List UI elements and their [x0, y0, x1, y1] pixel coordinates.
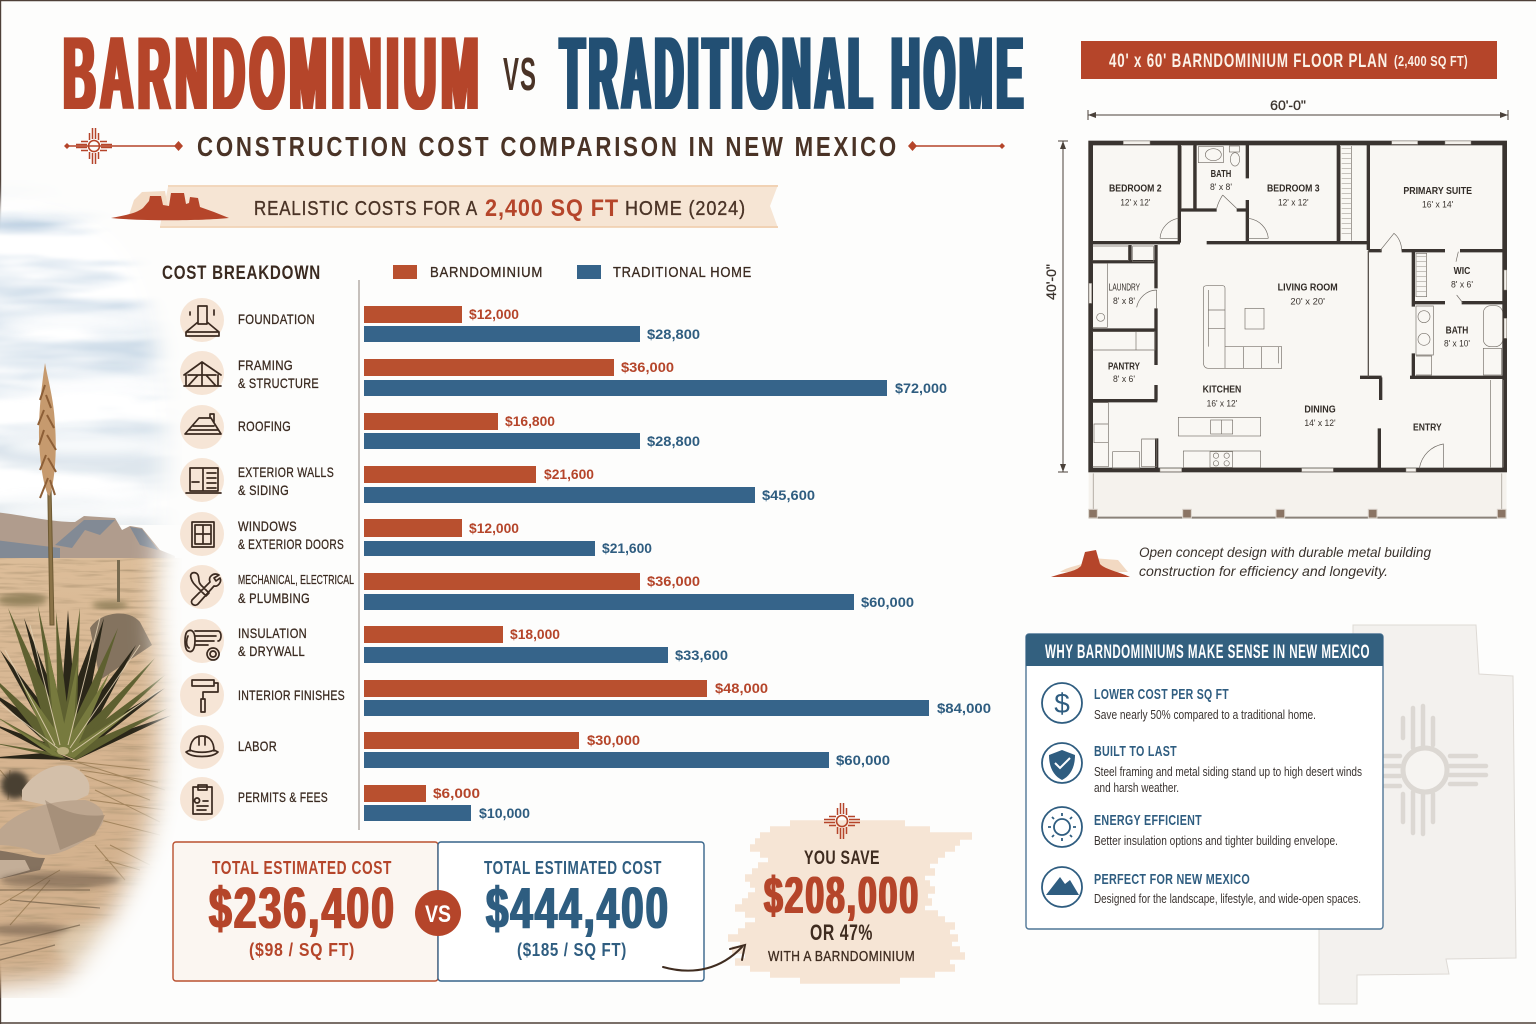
label: PERMITS & FEES	[238, 789, 328, 805]
legend: BARNDOMINIUM	[430, 265, 543, 281]
ornament right	[908, 141, 1005, 151]
room labels: BEDROOM 2	[1109, 183, 1162, 194]
icon: dollar: $	[1054, 688, 1070, 719]
title: vs: VS	[503, 48, 537, 100]
legend: TRADITIONAL HOME	[613, 265, 752, 281]
arrow to savings	[663, 945, 745, 971]
room labels: DINING	[1304, 404, 1336, 415]
room labels: 14' x 12'	[1304, 418, 1336, 428]
item: lower cost: Save nearly 50% compared to a traditional home.	[1094, 708, 1316, 722]
bars: $84,000	[937, 700, 991, 716]
panel: why barndominiums	[1026, 634, 1383, 929]
sofa and table	[1203, 286, 1282, 368]
entry storage	[1491, 380, 1503, 467]
row: framing	[180, 351, 947, 396]
room labels: 8' x 8'	[1113, 296, 1135, 306]
room labels: WIC	[1454, 266, 1471, 277]
island and counters	[1178, 417, 1261, 436]
icon: mountain	[1042, 867, 1082, 907]
distant rock behind yucca	[90, 613, 152, 680]
room labels: BATH	[1446, 325, 1468, 336]
label	[238, 518, 344, 552]
subtitle with ornaments	[64, 128, 1005, 164]
item: lower cost	[1042, 683, 1316, 723]
bars: $33,600	[675, 647, 728, 663]
label	[238, 625, 307, 659]
fixtures	[1093, 146, 1503, 468]
dimension: width: 60'-0"	[1270, 97, 1306, 113]
label: INSULATION	[238, 625, 307, 641]
room labels: ENTRY	[1413, 422, 1442, 433]
bars: $12,000	[469, 306, 519, 322]
bars: $36,000	[621, 359, 674, 375]
room labels: LIVING ROOM	[1278, 283, 1338, 294]
title: BARNDOMINIUM	[63, 16, 483, 132]
amount: $208,000	[764, 867, 920, 925]
percent: OR 47%	[810, 920, 873, 945]
bars: $60,000	[836, 752, 890, 768]
label: WINDOWS	[238, 518, 297, 534]
laundry	[1093, 246, 1155, 350]
row: windows	[180, 512, 652, 556]
item: perfect for new mexico: Designed for the landscape, lifestyle, and wide-open spaces.	[1094, 892, 1361, 906]
banner text: 2,400 SQ FT	[485, 195, 619, 222]
room labels: KITCHEN	[1203, 385, 1241, 396]
room labels: 12' x 12'	[1120, 197, 1151, 207]
floor plan	[1088, 141, 1507, 518]
label: & EXTERIOR DOORS	[238, 536, 344, 552]
item: perfect for new mexico	[1042, 867, 1361, 907]
porch	[1089, 473, 1506, 518]
label: INTERIOR FINISHES	[238, 687, 345, 703]
per sq ft: ($98 / SQ FT)	[249, 940, 355, 960]
doors	[1137, 195, 1463, 468]
bars: $18,000	[510, 626, 560, 642]
label	[238, 357, 319, 391]
dimension: height	[1043, 141, 1068, 472]
room labels: PANTRY	[1108, 361, 1140, 372]
brush background	[728, 824, 972, 980]
floor plan heading banner: 40' x 60' BARNDOMINIUM FLOOR PLAN	[1109, 50, 1388, 72]
label: & STRUCTURE	[238, 375, 319, 391]
room labels: 16' x 12'	[1207, 399, 1238, 409]
bars	[364, 626, 728, 663]
item: perfect for new mexico: PERFECT FOR NEW MEXICO	[1094, 871, 1250, 888]
row: roofing	[180, 405, 700, 449]
icon: insulation roll	[180, 619, 224, 663]
vs badge	[415, 890, 461, 936]
label: ROOFING	[238, 418, 291, 434]
icon: sun	[1042, 807, 1082, 847]
label: TOTAL ESTIMATED COST	[212, 857, 392, 878]
label	[238, 464, 334, 498]
bars: $72,000	[895, 380, 947, 396]
room labels	[1108, 169, 1473, 433]
floor plan heading banner	[1081, 41, 1497, 79]
walls	[1089, 141, 1507, 472]
icon: clipboard	[180, 777, 224, 821]
room labels: BATH	[1211, 169, 1231, 180]
legend	[393, 265, 752, 281]
item: energy efficient: Better insulation options and tighter building envelope.	[1094, 834, 1338, 848]
icon: paint roller	[180, 673, 224, 717]
label: & PLUMBING	[238, 590, 310, 606]
per sq ft: ($185 / SQ FT)	[517, 940, 627, 960]
bars: $45,600	[762, 487, 815, 503]
yucca flower stalk	[38, 363, 56, 625]
icon: roofing	[180, 405, 224, 449]
yucca leaves	[0, 610, 172, 760]
row: permits	[180, 777, 530, 821]
ornament left	[64, 128, 183, 164]
banner text	[254, 195, 746, 222]
rocks	[22, 765, 89, 808]
dry grass	[0, 760, 165, 925]
New Mexico map watermark	[1319, 625, 1516, 1004]
bars	[364, 519, 652, 556]
caption text: Open concept design with durable metal building	[1139, 544, 1431, 560]
bars	[364, 359, 947, 396]
label: FRAMING	[238, 357, 293, 373]
distant mesas	[0, 512, 174, 558]
icon: mesa	[1051, 550, 1130, 577]
room labels: 16' x 14'	[1422, 199, 1454, 209]
room labels: 20' x 20'	[1290, 296, 1325, 306]
amount: $236,400	[209, 876, 396, 941]
you save: YOU SAVE	[804, 847, 880, 869]
icon: wrench	[180, 565, 224, 609]
savings callout	[728, 803, 972, 980]
item: built to last: Steel framing and metal siding stand up to high desert winds	[1094, 765, 1362, 779]
room labels: LAUNDRY	[1109, 283, 1140, 294]
bars	[364, 732, 890, 768]
bars: $16,800	[505, 413, 555, 429]
label: LABOR	[238, 738, 277, 754]
icon: foundation	[180, 298, 224, 342]
bars	[364, 466, 815, 503]
item: energy efficient: ENERGY EFFICIENT	[1094, 812, 1202, 829]
icon: zia sun	[824, 803, 860, 839]
bars: $30,000	[587, 732, 640, 748]
item: lower cost: LOWER COST PER SQ FT	[1094, 686, 1229, 703]
room labels: 8' x 6'	[1113, 374, 1135, 384]
item: built to last: BUILT TO LAST	[1094, 743, 1177, 760]
item: energy efficient	[1042, 807, 1338, 848]
label: FOUNDATION	[238, 311, 315, 327]
bars: $21,600	[544, 466, 594, 482]
heading: cost breakdown: COST BREAKDOWN	[162, 262, 321, 284]
bars	[364, 680, 991, 716]
bars	[364, 785, 530, 821]
bars: $28,800	[647, 433, 700, 449]
icon: framing	[180, 351, 224, 395]
bath fixtures	[1198, 147, 1223, 163]
closet hatching	[1182, 146, 1352, 241]
amount: $444,400	[486, 876, 670, 941]
room labels: 8' x 10'	[1444, 339, 1470, 349]
icon: dollar	[1042, 683, 1082, 723]
bars: $12,000	[469, 520, 519, 536]
banner: realistic costs	[111, 185, 778, 228]
bars: $36,000	[647, 573, 700, 589]
label: TOTAL ESTIMATED COST	[484, 857, 662, 878]
subtitle text: CONSTRUCTION COST COMPARISON IN NEW MEXICO	[197, 131, 899, 162]
total box: barndominium	[173, 842, 438, 981]
desert landscape photo with yucca	[0, 182, 177, 998]
icon: exterior walls	[180, 458, 224, 502]
label: EXTERIOR WALLS	[238, 464, 334, 480]
icon: mesa	[111, 191, 229, 220]
total box: traditional	[438, 842, 704, 981]
label	[238, 572, 354, 606]
item: built to last	[1042, 743, 1362, 795]
label: & SIDING	[238, 482, 289, 498]
panel header	[1026, 634, 1383, 666]
row: foundation	[180, 298, 700, 342]
item: built to last: and harsh weather.	[1094, 781, 1179, 795]
primary bath	[1483, 306, 1503, 347]
icon: windows	[180, 512, 224, 556]
row: mechanical	[180, 565, 914, 610]
room labels: 8' x 6'	[1451, 279, 1473, 289]
dimension: height: 40'-0"	[1043, 264, 1059, 300]
room labels: 8' x 8'	[1210, 182, 1232, 192]
label: MECHANICAL, ELECTRICAL	[238, 572, 354, 587]
row: insulation	[180, 619, 728, 663]
bars: $48,000	[715, 680, 768, 696]
floor plan caption	[1051, 544, 1431, 579]
with a barndominium: WITH A BARNDOMINIUM	[768, 948, 915, 965]
bars: $60,000	[861, 594, 914, 610]
caption text	[1139, 544, 1431, 579]
bars	[364, 413, 700, 449]
room labels: PRIMARY SUITE	[1403, 186, 1472, 197]
room labels: BEDROOM 3	[1267, 183, 1320, 194]
bars: $21,600	[602, 540, 652, 556]
bars: $28,800	[647, 326, 700, 342]
bars	[364, 306, 700, 342]
windows	[1089, 141, 1507, 472]
bars: $10,000	[479, 805, 530, 821]
chart axis	[358, 280, 360, 830]
banner text: REALISTIC COSTS FOR A	[254, 198, 478, 220]
row: interior finishes	[180, 673, 991, 717]
row: labor	[180, 725, 890, 769]
bars: $6,000	[433, 785, 480, 801]
vs badge: VS	[425, 901, 451, 928]
banner text: HOME (2024)	[625, 198, 746, 220]
dimension: width	[1088, 97, 1508, 120]
caption text: construction for efficiency and longevity.	[1139, 563, 1388, 579]
label: & DRYWALL	[238, 643, 305, 659]
row: exterior walls	[180, 458, 815, 503]
icon: shield	[1042, 743, 1082, 783]
room labels: 12' x 12'	[1278, 197, 1309, 207]
floor plan heading banner: (2,400 SQ FT)	[1394, 53, 1468, 70]
bars	[364, 573, 914, 610]
icon: hard hat	[180, 725, 224, 769]
